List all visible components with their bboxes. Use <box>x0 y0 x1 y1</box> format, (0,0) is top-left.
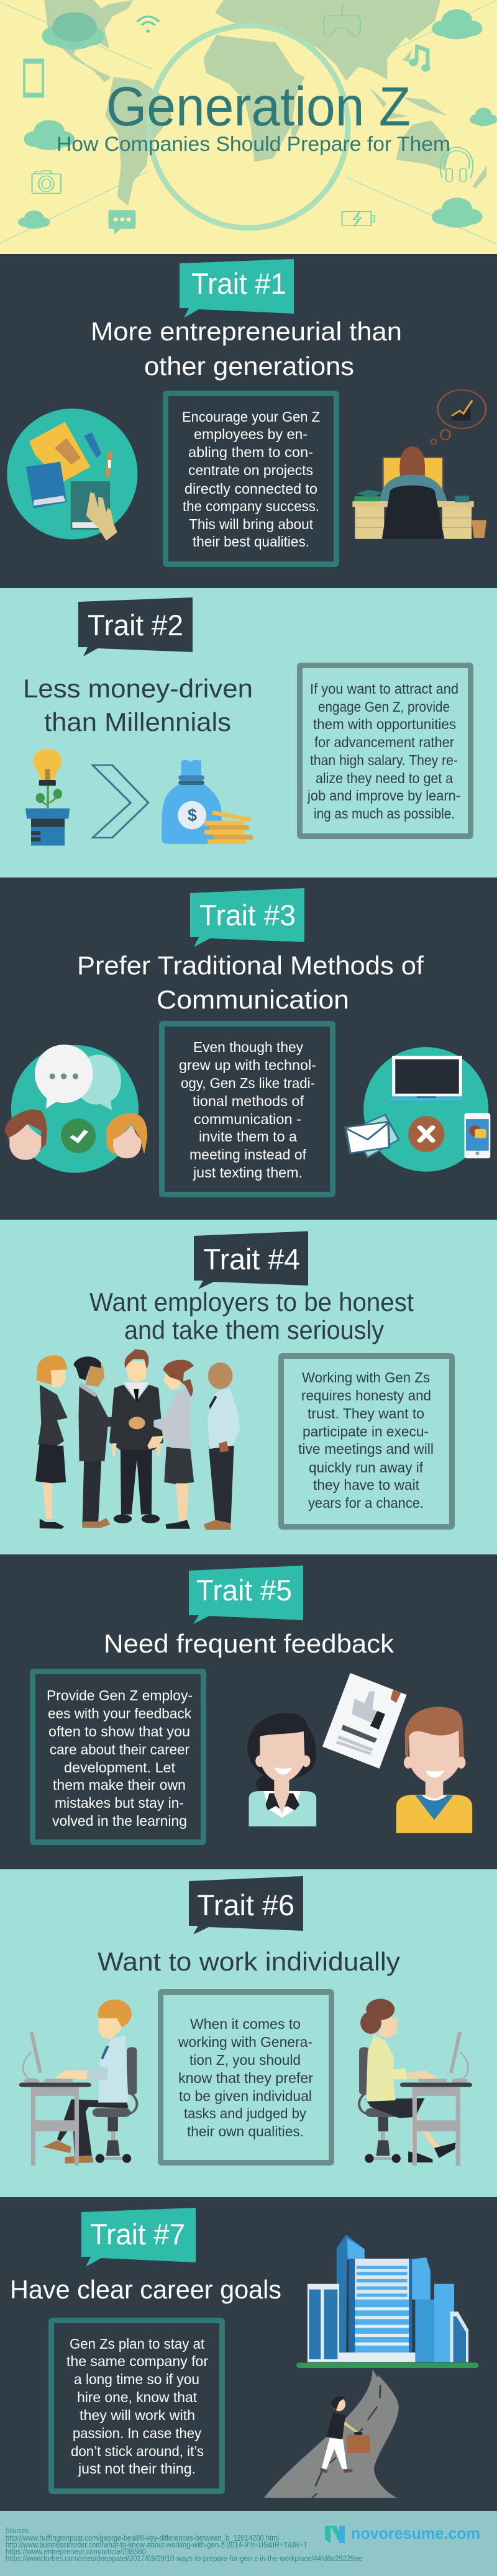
text box: trait 4: tive meetings and will <box>298 1441 434 1457</box>
text box: trait 4: requires honesty and <box>301 1387 431 1404</box>
text box: trait 4: Working with Gen Zs <box>302 1369 430 1386</box>
heading: trait 4: Want employers to be honest <box>89 1287 414 1317</box>
text box: trait 3: just texting them. <box>193 1164 303 1181</box>
heading: trait 7: Have clear career goals <box>10 2275 281 2304</box>
desk and computer <box>400 2031 472 2166</box>
text box: trait 7: a long time so if you <box>74 2371 199 2387</box>
badge: trait 3 <box>190 888 304 947</box>
text box: trait 2: ing as much as possible. <box>314 805 455 822</box>
text box: trait 5: care about their career <box>50 1741 189 1757</box>
text box: trait 1: abling them to con- <box>188 444 313 460</box>
illustration: five coworkers shaking hands <box>35 1349 240 1530</box>
text box: trait 7: passion. In case they <box>73 2425 201 2441</box>
heading: trait 3: Communication <box>157 985 349 1014</box>
heading: trait 4: and take them seriously <box>124 1315 384 1345</box>
worker <box>360 1999 456 2162</box>
text box: trait 1: This will bring about <box>189 516 314 532</box>
logo: novoresume: novoresume.com <box>351 2524 480 2542</box>
text box: trait 5 <box>32 1672 204 1842</box>
icon: wifi <box>137 17 159 33</box>
illustration: digital communication crossed out <box>345 1047 490 1172</box>
icon: music notes <box>409 44 430 71</box>
text box: trait 2: job and improve by learn- <box>307 787 460 804</box>
text box: trait 5: Provide Gen Z employ- <box>47 1687 193 1703</box>
text box: trait 7: Gen Zs plan to stay at <box>70 2336 205 2352</box>
text box: trait 1: Encourage your Gen Z <box>182 409 320 425</box>
text box: trait 5: development. Let <box>64 1759 176 1776</box>
illustration: people talking in person <box>5 1045 147 1173</box>
text box: trait 3: ogy, Gen Zs like tradi- <box>181 1075 315 1091</box>
heading: trait 6: Want to work individually <box>98 1947 400 1976</box>
badge: trait 6 <box>189 1876 303 1934</box>
sources: Sources: <box>6 2526 30 2535</box>
badge: trait 1: Trait #1 <box>191 267 286 300</box>
badge: trait 4 <box>194 1231 308 1289</box>
hero banner <box>0 0 497 254</box>
text box: trait 2: for advancement rather <box>314 734 454 750</box>
chair <box>93 2047 137 2163</box>
person: man with dark hair <box>73 1356 129 1528</box>
heading: trait 3: Prefer Traditional Methods of <box>77 951 424 980</box>
text box: trait 2: If you want to attract and <box>310 681 458 697</box>
text box: trait 1 <box>165 394 337 564</box>
text box: trait 5: often to show that you <box>48 1723 190 1739</box>
sources: http://www.businessinsider.com/what-to-know-about-working-with-gen-z-2014-9?r=US&IR=T&IR=T <box>6 2541 308 2549</box>
badge: trait 2 <box>78 597 193 656</box>
chair <box>359 2047 403 2163</box>
text box: trait 4: quickly run away if <box>309 1459 424 1476</box>
text box: trait 7: they will work with <box>80 2407 195 2423</box>
heading: trait 2: than Millennials <box>44 707 231 737</box>
heading: trait 1: More entrepreneurial than <box>91 317 402 346</box>
sources: https://www.entrepreneur.com/article/236560 <box>6 2547 146 2556</box>
badge: trait 4: Trait #4 <box>203 1243 300 1276</box>
illustration: worker at desk with thought bubble <box>352 390 486 539</box>
text box: trait 4: they have to wait <box>313 1477 420 1493</box>
icon: game controller <box>324 5 360 36</box>
badge: trait 1 <box>180 259 294 318</box>
person: man in centre suit <box>109 1349 163 1523</box>
text box: trait 1: centrate on projects <box>188 462 313 478</box>
heading: trait 1 <box>91 317 402 381</box>
footer <box>0 2511 497 2576</box>
text box: trait 5: ees with your feedback <box>48 1705 191 1721</box>
person: woman in grey blouse <box>147 1360 194 1529</box>
badge: trait 7: Trait #7 <box>90 2218 185 2251</box>
text box: trait 4: participate in execu- <box>303 1423 429 1440</box>
icon: camera <box>32 171 61 193</box>
text box: trait 7: the same company for <box>66 2353 208 2369</box>
icon: chat bubble <box>108 210 135 234</box>
text box: trait 1: their best qualities. <box>193 533 309 550</box>
text box: trait 2: them with opportunities <box>313 716 456 732</box>
handshake <box>129 1417 145 1429</box>
heading: trait 2 <box>23 674 253 737</box>
text box: trait 5: mistakes but stay in- <box>55 1795 184 1811</box>
text box: trait 3: grew up with technol- <box>179 1057 316 1073</box>
text box: trait 6: When it comes to <box>190 2016 301 2032</box>
person: woman with orange hair <box>35 1355 68 1529</box>
text box: trait 3: Even though they <box>193 1039 303 1055</box>
illustration: money bag and coins <box>162 760 253 844</box>
panel: trait 4 <box>0 1220 497 1554</box>
icon: headphones <box>440 147 473 181</box>
text box: trait 2 <box>299 666 471 836</box>
icon: battery <box>342 211 375 227</box>
world map <box>44 0 486 206</box>
desk and computer <box>19 2031 91 2166</box>
badge: trait 7 <box>81 2208 196 2267</box>
panel: trait 3 <box>0 878 497 1220</box>
illustration: light bulb plant <box>25 749 70 846</box>
badge: trait 3: Trait #3 <box>199 899 296 932</box>
illustration: man working at computer <box>19 2000 137 2166</box>
sources: http://www.huffingtonpost.com/george-beall/8-key-differences-between_b_12814200.html <box>6 2534 279 2542</box>
badge: trait 2: Trait #2 <box>88 609 183 642</box>
text box: trait 2: alize they need to get a <box>316 770 453 786</box>
text box: trait 7: don’t stick around, it’s <box>71 2443 204 2459</box>
text box: trait 7: just not their thing. <box>78 2460 196 2477</box>
illustration: road to success and walker <box>264 2370 399 2498</box>
panel: trait 6 <box>0 1869 497 2197</box>
text box: trait 3: invite them to a <box>199 1128 297 1145</box>
text box: trait 6 <box>160 1992 332 2162</box>
illustration: office buildings <box>296 2234 478 2368</box>
icon: smartphone <box>23 58 44 98</box>
badge: trait 6: Trait #6 <box>197 1889 294 1921</box>
heading: trait 3 <box>77 951 424 1014</box>
panel: trait 1 <box>0 254 497 588</box>
heading: trait 2: Less money-driven <box>23 674 253 703</box>
badge: trait 5: Trait #5 <box>196 1574 292 1607</box>
illustration: man smiling <box>396 1707 472 1833</box>
panel: trait 7 <box>0 2197 497 2511</box>
text box: trait 6: know that they prefer <box>178 2070 313 2086</box>
heading: trait 1: other generations <box>144 351 354 381</box>
text box: trait 6: their own qualities. <box>187 2123 304 2139</box>
text box: trait 4: years for a chance. <box>308 1495 424 1511</box>
text box: trait 3 <box>162 1023 333 1195</box>
worker <box>43 2000 132 2164</box>
subtitle: How Companies Should Prepare for Them <box>57 132 450 155</box>
title: Generation Z <box>106 75 411 137</box>
illustration: woman working at computer <box>359 1999 472 2166</box>
person: bald man in light shirt <box>204 1363 240 1530</box>
globe ring <box>149 25 348 228</box>
text box: trait 6: tion Z, you should <box>189 2052 301 2068</box>
text box: trait 4 <box>281 1356 452 1526</box>
text box: trait 1: directly connected to <box>185 481 317 497</box>
text box: trait 3: meeting instead of <box>189 1146 307 1163</box>
sources <box>6 2526 362 2563</box>
text box: trait 3: tional methods of <box>193 1093 304 1109</box>
text box: trait 4: trust. They want to <box>308 1405 424 1422</box>
text box: trait 3: communication - <box>194 1111 301 1127</box>
icon: clouds <box>18 9 497 229</box>
text box: trait 5: volved in the learning <box>52 1813 187 1829</box>
tech icons and clouds <box>18 5 497 234</box>
text box: trait 2: than high salary. They re- <box>310 752 458 768</box>
heading: trait 5: Need frequent feedback <box>104 1629 394 1658</box>
text box: trait 5: them make their own <box>53 1777 186 1793</box>
text box: trait 6: to be given individual <box>179 2088 312 2104</box>
text box: trait 6: working with Genera- <box>178 2034 312 2050</box>
panel: trait 5 <box>0 1554 497 1869</box>
text box: trait 7 <box>51 2320 222 2492</box>
icon: chevron arrow <box>93 765 148 838</box>
badge: trait 5 <box>189 1566 303 1624</box>
sources: https://www.forbes.com/sites/deeppatel/2017/03/29/10-ways-to-prepare-for-gen-z-in-the-workplace/#4fd6e29229ee <box>6 2554 362 2563</box>
illustration: woman smiling <box>247 1713 316 1826</box>
illustration: money bag and coins: $ <box>188 805 197 825</box>
panel: trait 2 <box>0 588 497 878</box>
illustration: books and hand <box>7 409 137 541</box>
heading: trait 4 <box>89 1287 414 1345</box>
text box: trait 1: the company success. <box>183 498 319 514</box>
text box: trait 7: hire one, know that <box>77 2389 198 2405</box>
sunburst lines <box>0 0 497 244</box>
illustration: feedback document with thumbs up <box>322 1673 407 1769</box>
text box: trait 1: employees by en- <box>194 426 308 442</box>
text box: trait 2: engage Gen Z, provide <box>318 699 450 715</box>
text box: trait 6: tasks and judged by <box>184 2105 306 2121</box>
